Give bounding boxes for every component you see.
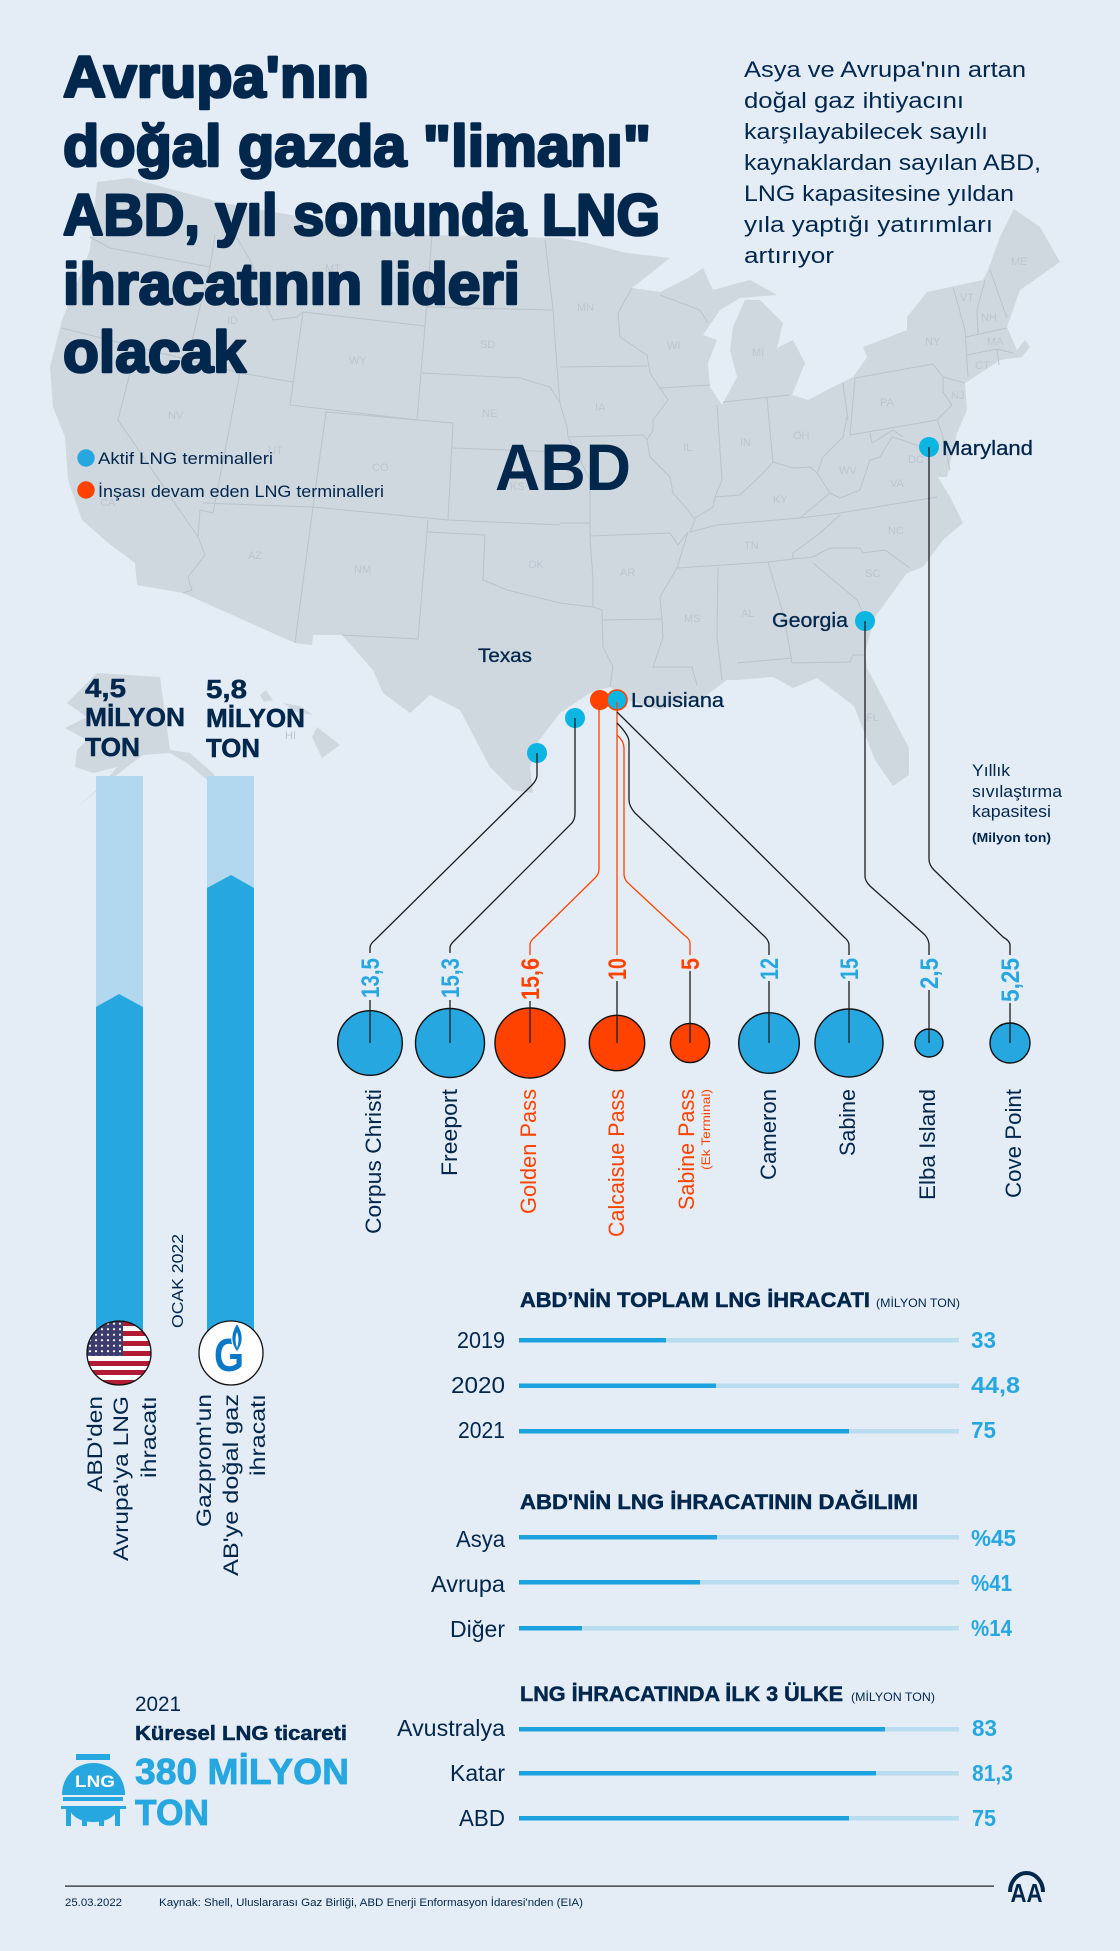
- panel: US LNG export distribution: [431, 1490, 1016, 1642]
- legend: [77, 449, 384, 501]
- bar row: Avrupa: [431, 1570, 1012, 1597]
- connector lines: [370, 447, 1010, 1043]
- bar row: Avrupa: Avrupa: [431, 1571, 505, 1597]
- capacity bubbles: [338, 1008, 1030, 1078]
- map: Alaska: [65, 673, 215, 807]
- bar row: 2019: [457, 1327, 996, 1353]
- bar row: Avustralya: Avustralya: [397, 1715, 505, 1741]
- map: state abbreviations: NY: [925, 336, 941, 348]
- footer rule: [65, 1886, 994, 1887]
- bar caption: US: Avrupa'ya LNG: [110, 1396, 133, 1561]
- bar caption: Gazprom: Gazprom'un: [193, 1394, 216, 1527]
- bar row: Asya: %45: [971, 1525, 1016, 1551]
- map: state abbreviations: WY: [349, 355, 367, 367]
- panel: global LNG trade: [61, 1693, 349, 1833]
- intro text: kaynaklardan sayılan ABD,: [744, 150, 1041, 175]
- bar row: ABD: ABD: [459, 1805, 505, 1831]
- terminal names: Calcaisue Pass: [604, 1089, 629, 1237]
- bar row: Diğer: [450, 1615, 1012, 1642]
- capacity note: [972, 761, 1063, 845]
- map: Hawaii: [260, 690, 340, 758]
- title: doğal gazda "limanı": [63, 114, 651, 179]
- map: state abbreviations: AZ: [248, 550, 262, 562]
- map: state abbreviations: ME: [1011, 256, 1028, 268]
- location dots: [527, 437, 939, 763]
- terminal names: Freeport: [437, 1089, 462, 1176]
- bar value: 5,8 million tons: MİLYON: [206, 703, 305, 733]
- map: state abbreviations: KY: [773, 494, 788, 506]
- map: state abbreviations: CT: [975, 360, 990, 372]
- bar caption: US: ABD'den: [84, 1396, 107, 1492]
- bar row: Avustralya: [397, 1715, 997, 1741]
- left bar chart: January 2022 exports: [84, 673, 305, 1576]
- icon: LNG tank: [61, 1754, 126, 1826]
- map: state abbreviations: [100, 256, 1028, 724]
- map: USA: [50, 178, 1060, 807]
- map: state abbreviations: NC: [888, 525, 904, 537]
- map label: Texas: Texas: [478, 646, 532, 667]
- icon: LNG tank: LNG: [75, 1772, 115, 1791]
- map: state abbreviations: AR: [620, 567, 635, 579]
- stat text: [135, 1693, 349, 1833]
- heading: total exports: ABD’NİN TOPLAM LNG İHRACATI: [520, 1289, 870, 1312]
- map: state abbreviations: IA: [595, 402, 606, 414]
- intro text: artırıyor: [744, 243, 834, 268]
- bar row: Avustralya: 83: [972, 1715, 997, 1741]
- bar value: 5,8 million tons: TON: [206, 733, 260, 763]
- map: state abbreviations: NJ: [951, 390, 964, 402]
- map: state abbreviations: AL: [741, 608, 754, 620]
- icon: AA logo: AA: [1010, 1878, 1043, 1908]
- bar caption: Gazprom: AB'ye doğal gaz: [220, 1394, 243, 1576]
- footer source: Kaynak: Shell, Uluslararası Gaz Birliği, ABD Enerji Enformasyon İdaresi'nden (EIA): [159, 1896, 583, 1909]
- map: state abbreviations: ID: [227, 315, 238, 327]
- bar row: Katar: Katar: [450, 1760, 505, 1786]
- intro text: doğal gaz ihtiyacını: [744, 88, 964, 113]
- stat text: TON: [135, 1792, 209, 1833]
- map: state abbreviations: SD: [480, 339, 495, 351]
- map: state abbreviations: VA: [890, 478, 905, 490]
- bar row: 2020: 2020: [451, 1372, 505, 1398]
- capacity values: 2,5: [916, 958, 944, 989]
- bar row: Asya: Asya: [456, 1526, 505, 1552]
- capacity values: 15: [836, 958, 864, 980]
- bar value: 4,5 million tons: MİLYON: [85, 702, 185, 732]
- capacity note: Yıllık: [972, 761, 1011, 780]
- bar row: Katar: [450, 1760, 1013, 1786]
- terminal names: Cove Point: [1001, 1089, 1026, 1198]
- terminal names: Sabine Pass: [674, 1089, 699, 1210]
- heading: total exports: (MİLYON TON): [876, 1296, 960, 1310]
- map: state abbreviations: NH: [981, 312, 997, 324]
- bar row: Avrupa: %41: [971, 1570, 1012, 1596]
- map: state borders: [62, 235, 1013, 687]
- bar row: 2019: 33: [971, 1327, 996, 1353]
- bar caption: US: [84, 1396, 161, 1561]
- bar row: 2020: [451, 1372, 1020, 1398]
- map: state abbreviations: WV: [839, 465, 857, 477]
- capacity note: (Milyon ton): [972, 830, 1051, 845]
- map: state abbreviations: IN: [740, 437, 751, 449]
- bar: Gazprom to EU: [207, 776, 254, 1336]
- stat text: Küresel LNG ticareti: [135, 1723, 347, 1745]
- intro text: yıla yaptığı yatırımları: [744, 212, 993, 237]
- capacity values: 15,6: [517, 958, 545, 1000]
- intro text: Asya ve Avrupa'nın artan: [744, 57, 1026, 82]
- bar row: 2021: 2021: [458, 1417, 505, 1443]
- capacity values: 5: [677, 958, 705, 970]
- bar caption: Gazprom: ihracatı: [247, 1394, 270, 1476]
- title: ihracatının lideri: [63, 252, 520, 317]
- map: state abbreviations: NM: [354, 564, 371, 576]
- capacity values: 15,3: [437, 958, 465, 998]
- bar value: 4,5 million tons: 4,5: [85, 673, 126, 703]
- map: state abbreviations: MN: [577, 302, 594, 314]
- capacity values: 13,5: [357, 958, 385, 998]
- map: state abbreviations: CO: [372, 462, 389, 474]
- map: state abbreviations: FL: [866, 712, 879, 724]
- bar row: ABD: [459, 1805, 996, 1831]
- title: [63, 45, 660, 385]
- map: state abbreviations: MS: [684, 613, 700, 625]
- capacity values: 12: [756, 958, 784, 980]
- map: state abbreviations: NE: [482, 408, 497, 420]
- intro text: LNG kapasitesine yıldan: [744, 181, 1014, 206]
- icon: Gazprom logo: G: [214, 1329, 244, 1381]
- map: Hawaii: HI: [285, 730, 296, 742]
- map: state abbreviations: IL: [683, 442, 692, 454]
- map: state abbreviations: UT: [268, 445, 283, 457]
- terminal capacity chart: [338, 437, 1063, 1237]
- title: Avrupa'nın: [63, 45, 369, 110]
- capacity values: 10: [604, 958, 632, 980]
- map: contiguous states landmass: [50, 178, 1060, 793]
- heading: top exporters: LNG İHRACATINDA İLK 3 ÜLKE: [520, 1683, 843, 1706]
- intro text: [744, 57, 1041, 268]
- icon: US flag: [87, 1321, 151, 1385]
- title: olacak: [63, 320, 247, 385]
- heading: distribution: ABD'NİN LNG İHRACATININ DAĞILIMI: [520, 1490, 918, 1514]
- terminal names: Cameron: [756, 1089, 781, 1180]
- bar row: Katar: 81,3: [972, 1760, 1013, 1786]
- terminal names: Elba Island: [915, 1089, 940, 1200]
- title: ABD, yıl sonunda LNG: [63, 183, 660, 248]
- terminal names: [361, 1089, 1026, 1237]
- capacity values: [357, 958, 1025, 1002]
- bar row: 2021: 75: [971, 1417, 996, 1443]
- legend: terminals under construction: İnşası devam eden LNG terminalleri: [98, 482, 384, 501]
- map: state abbreviations: CA: [100, 497, 116, 509]
- bar row: 2021: [458, 1417, 996, 1443]
- bar row: Diğer: %14: [971, 1615, 1012, 1641]
- bar value: 4,5 million tons: TON: [85, 732, 140, 762]
- terminal names: Golden Pass: [516, 1089, 541, 1214]
- capacity values: 5,25: [997, 958, 1025, 1002]
- bar caption: US: ihracatı: [138, 1396, 161, 1478]
- bar value: 5,8 million tons: [206, 674, 305, 763]
- map: state abbreviations: PA: [880, 397, 895, 409]
- bar value: 4,5 million tons: [85, 673, 185, 762]
- intro text: karşılayabilecek sayılı: [744, 119, 988, 144]
- icon: Gazprom logo: [199, 1321, 263, 1385]
- terminal names: Sabine: [835, 1089, 860, 1156]
- map label: ABD: ABD: [495, 430, 631, 504]
- bar row: ABD: 75: [972, 1805, 996, 1831]
- bar row: Diğer: Diğer: [450, 1616, 505, 1642]
- heading: top exporters: (MİLYON TON): [851, 1690, 935, 1704]
- map: state abbreviations: TN: [744, 540, 759, 552]
- bar row: Asya: [456, 1525, 1016, 1552]
- bar: US LNG to Europe: [96, 776, 143, 1336]
- map: state abbreviations: MI: [752, 347, 764, 359]
- map: state abbreviations: DC: [908, 454, 924, 466]
- panel: total US LNG exports: [451, 1289, 1020, 1443]
- bar value: 5,8 million tons: 5,8: [206, 674, 247, 704]
- map label: Louisiana: Louisiana: [631, 690, 725, 712]
- legend: active terminals: Aktif LNG terminalleri: [98, 449, 273, 468]
- terminal names: Corpus Christi: [361, 1089, 386, 1234]
- map: state abbreviations: SC: [865, 568, 880, 580]
- footer date: 25.03.2022: [65, 1897, 122, 1909]
- bar row: 2019: 2019: [457, 1327, 505, 1353]
- map: state abbreviations: MT: [325, 263, 341, 275]
- terminal names: (Ek Terminal): [699, 1089, 713, 1170]
- capacity note: kapasitesi: [972, 802, 1051, 821]
- map: state abbreviations: WI: [667, 340, 680, 352]
- map: state abbreviations: OK: [528, 559, 545, 571]
- map: state abbreviations: NV: [168, 410, 184, 422]
- bar caption: Gazprom: [193, 1394, 270, 1576]
- capacity note: sıvılaştırma: [972, 782, 1063, 801]
- period label: OCAK 2022: [170, 1234, 187, 1328]
- map: state abbreviations: KS: [510, 481, 525, 493]
- bar row: 2020: 44,8: [971, 1372, 1020, 1398]
- map: state abbreviations: VT: [960, 292, 974, 304]
- stat text: 380 MİLYON: [135, 1751, 349, 1792]
- map: state abbreviations: OH: [793, 430, 810, 442]
- stat text: 2021: [135, 1693, 181, 1716]
- map label: Maryland: Maryland: [942, 438, 1033, 460]
- map: state abbreviations: MA: [987, 336, 1004, 348]
- panel: top 3 LNG exporters: [397, 1683, 1013, 1831]
- map label: Georgia: Georgia: [772, 610, 849, 632]
